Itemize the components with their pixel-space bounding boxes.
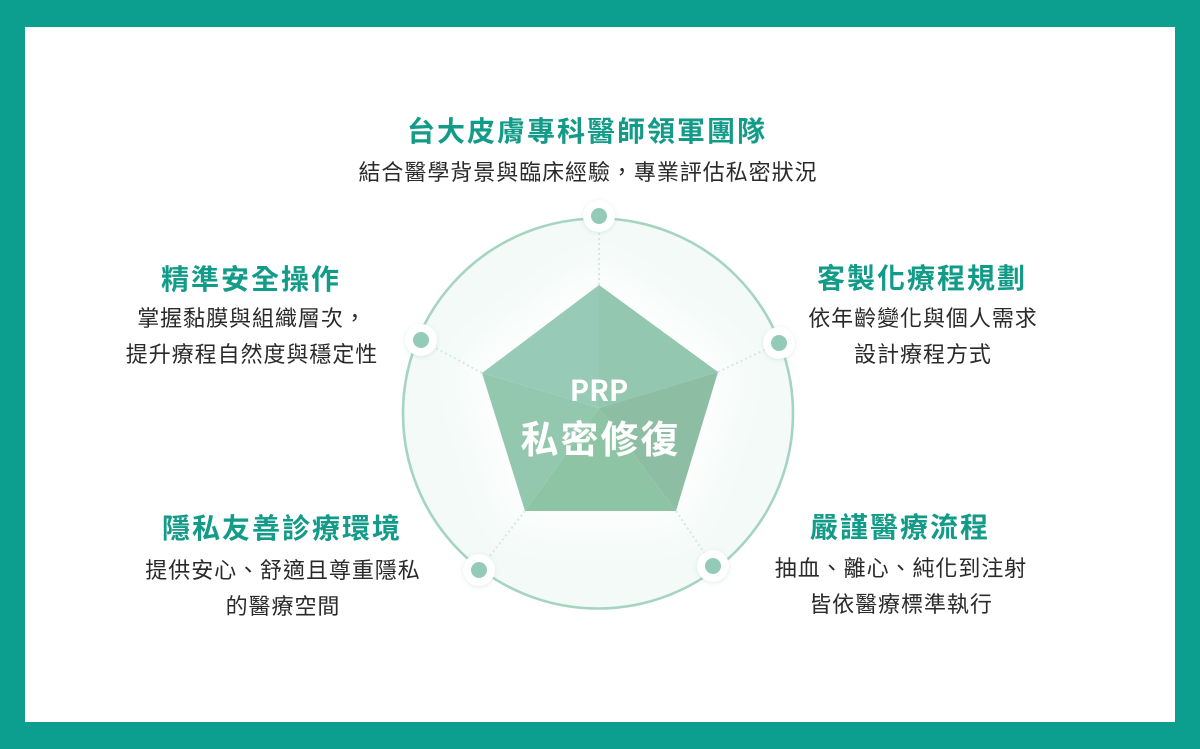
center label: 私密修復 bbox=[520, 409, 681, 464]
description: right bbox=[808, 306, 1038, 367]
description: bottom right: 抽血、離心、純化到注射 bbox=[775, 556, 1027, 581]
description: right: 依年齡變化與個人需求 bbox=[808, 306, 1038, 331]
text block: bottom right bbox=[775, 512, 1027, 617]
description: top: 結合醫學背景與臨床經驗，專業評估私密狀況 bbox=[358, 160, 818, 185]
central pentagon bbox=[482, 285, 718, 511]
node: right bbox=[763, 327, 795, 359]
center label bbox=[520, 368, 681, 464]
heading: top: 台大皮膚專科醫師領軍團隊 bbox=[407, 116, 767, 147]
outer circle bbox=[403, 218, 793, 608]
diagram: PRP pentagon in circle bbox=[402, 205, 796, 610]
description: left bbox=[126, 306, 378, 367]
description: bottom left bbox=[145, 558, 421, 619]
description: bottom left: 的醫療空間 bbox=[226, 594, 340, 619]
description: bottom right bbox=[775, 556, 1027, 617]
node: top bbox=[583, 200, 615, 232]
heading: bottom left: 隱私友善診療環境 bbox=[162, 513, 402, 544]
node: left bbox=[405, 324, 437, 356]
heading: left: 精準安全操作 bbox=[161, 264, 341, 295]
description: bottom right: 皆依醫療標準執行 bbox=[809, 592, 993, 617]
text block: bottom left bbox=[145, 513, 421, 619]
description: bottom left: 提供安心、舒適且尊重隱私 bbox=[145, 558, 421, 583]
node: bottom right bbox=[697, 550, 729, 582]
node: bottom left bbox=[463, 554, 495, 586]
description: right: 設計療程方式 bbox=[854, 342, 992, 367]
dashed connectors bbox=[421, 216, 779, 570]
description: left: 掌握黏膜與組織層次， bbox=[137, 306, 367, 331]
heading: bottom right: 嚴謹醫療流程 bbox=[810, 512, 990, 543]
text block: left bbox=[126, 264, 378, 367]
text block: top bbox=[358, 116, 818, 185]
center label: PRP bbox=[570, 368, 628, 410]
text block: right bbox=[808, 263, 1038, 367]
heading: right: 客製化療程規劃 bbox=[817, 263, 1027, 294]
description: left: 提升療程自然度與穩定性 bbox=[126, 342, 378, 367]
